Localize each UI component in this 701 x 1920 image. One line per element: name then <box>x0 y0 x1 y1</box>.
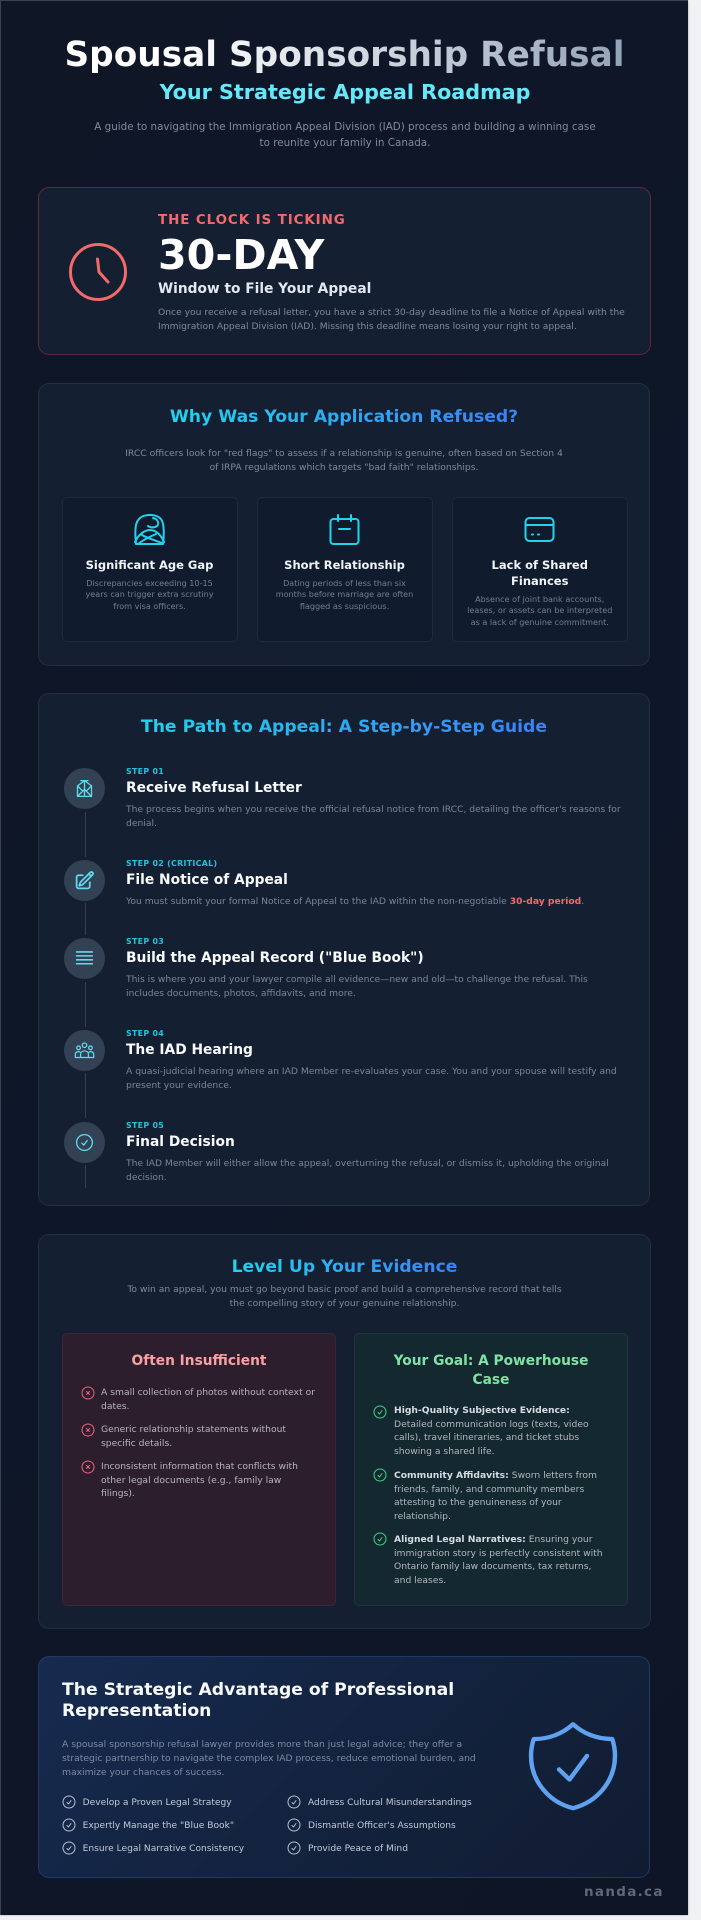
card text: leases, or assets can be interpreted <box>467 605 612 615</box>
box heading: Case <box>473 1372 509 1388</box>
panel: strategic advantage <box>38 1656 650 1878</box>
item 1 <box>374 1405 589 1457</box>
description <box>127 1284 562 1309</box>
step title: Build the Appeal Record ("Blue Book") <box>126 950 424 966</box>
step 5 <box>64 1120 609 1183</box>
item text <box>394 1405 589 1457</box>
intro text: A guide to navigating the Immigration Appeal Division (IAD) process and building a winning case <box>94 121 596 133</box>
item text: Detailed communication logs (texts, video <box>394 1419 589 1430</box>
box: powerhouse case <box>354 1333 628 1606</box>
icon: pencil <box>64 860 105 900</box>
title: Spousal Sponsorship Refusal <box>64 35 624 75</box>
card: short relationship <box>256 497 432 642</box>
panel: level up evidence <box>38 1234 651 1629</box>
item text: Community Affidavits: Sworn letters from <box>394 1470 597 1481</box>
description: strategic partnership to navigate the complex IAD process, reduce emotional burden, and <box>62 1753 476 1764</box>
step title: The IAD Hearing <box>126 1042 253 1058</box>
item 2 <box>82 1424 286 1449</box>
benefit <box>288 1794 508 1810</box>
item text: attesting to the genuineness of your <box>394 1497 562 1508</box>
item text: dates. <box>101 1401 129 1412</box>
card text: Dating periods of less than six <box>283 578 406 588</box>
card title: Lack of Shared <box>492 558 588 572</box>
step text: decision. <box>126 1172 167 1183</box>
icon: x <box>82 1386 94 1400</box>
subtitle: Your Strategic Appeal Roadmap <box>160 80 530 104</box>
item text <box>101 1387 315 1412</box>
benefit: Dismantle Officer's Assumptions <box>308 1820 456 1830</box>
description <box>125 448 563 473</box>
description: the compelling story of your genuine relationship. <box>230 1298 459 1309</box>
icon: age gap <box>134 514 165 545</box>
brand mark: nanda.ca <box>584 1884 664 1900</box>
card title: Short Relationship <box>284 558 405 572</box>
icon: people <box>64 1030 105 1070</box>
item text: Generic relationship statements without <box>101 1424 286 1435</box>
item text: Aligned Legal Narratives: Ensuring your <box>394 1534 593 1545</box>
deadline description <box>158 307 625 332</box>
icon: check circle <box>64 1122 105 1162</box>
step text: The IAD Member will either allow the appeal, overturning the refusal, or dismiss it, upholding the original <box>126 1158 609 1169</box>
item 3 <box>82 1460 298 1499</box>
card title: Significant Age Gap <box>86 558 213 572</box>
item text: immigration story is perfectly consistent with <box>394 1548 603 1559</box>
item text: and leases. <box>394 1575 446 1586</box>
item 2 <box>372 1467 612 1523</box>
card: age gap <box>62 497 238 642</box>
description: maximize your chances of success. <box>62 1767 224 1778</box>
step 1 <box>64 766 621 829</box>
item text: A small collection of photos without context or <box>101 1387 315 1398</box>
icon: x <box>82 1460 94 1474</box>
card text: Absence of joint bank accounts, <box>475 594 604 604</box>
panel: why refused <box>38 383 650 666</box>
step text <box>126 1066 617 1091</box>
panel: 30-day deadline <box>38 187 651 355</box>
benefit <box>62 1817 282 1833</box>
deadline description: Immigration Appeal Division (IAD). Missing this deadline means losing your right to appeal. <box>158 321 577 332</box>
benefit <box>288 1817 508 1833</box>
box heading: Your Goal: A Powerhouse <box>394 1352 588 1368</box>
benefit <box>62 1794 282 1810</box>
icon: letter <box>64 768 105 808</box>
step text: denial. <box>126 818 157 829</box>
step title: File Notice of Appeal <box>126 872 288 888</box>
step text: includes documents, photos, affidavits, and more. <box>126 988 356 999</box>
card text: flagged as suspicious. <box>300 600 389 610</box>
card text: Discrepancies exceeding 10-15 <box>86 578 213 588</box>
card text <box>276 578 413 610</box>
intro text <box>94 121 596 149</box>
intro text: to reunite your family in Canada. <box>260 137 430 149</box>
card text: years can trigger extra scrutiny <box>86 589 214 599</box>
icon: check <box>372 1467 388 1483</box>
item 1 <box>82 1386 315 1412</box>
item text: other legal documents (e.g., family law <box>101 1475 281 1486</box>
icon: check <box>374 1406 386 1418</box>
card text <box>86 578 214 610</box>
benefit: Address Cultural Misunderstandings <box>308 1798 472 1808</box>
item text: filings). <box>101 1488 135 1499</box>
step label: STEP 02 (CRITICAL) <box>126 858 217 868</box>
icon: shield <box>517 1712 629 1820</box>
step title: Receive Refusal Letter <box>126 780 302 796</box>
description: of IRPA regulations which targets "bad faith" relationships. <box>210 462 478 473</box>
item text: showing a shared life. <box>394 1446 495 1457</box>
step text: present your evidence. <box>126 1080 232 1091</box>
step 4 <box>64 1028 617 1091</box>
benefit <box>288 1840 508 1856</box>
card text <box>467 594 612 626</box>
big number: 30-DAY <box>158 231 324 279</box>
benefit: Provide Peace of Mind <box>308 1844 408 1854</box>
card title <box>492 558 588 588</box>
description <box>62 1738 476 1779</box>
window text: Window to File Your Appeal <box>158 281 371 297</box>
card text: from visa officers. <box>113 600 186 610</box>
benefit: Ensure Legal Narrative Consistency <box>83 1844 244 1854</box>
box heading <box>394 1352 588 1388</box>
heading: Why Was Your Application Refused? <box>170 407 518 427</box>
description: IRCC officers look for "red flags" to assess if a relationship is genuine, often based on Section 4 <box>125 448 563 459</box>
item text: High-Quality Subjective Evidence: <box>394 1405 570 1416</box>
description: To win an appeal, you must go beyond basic proof and build a comprehensive record that tells <box>127 1284 562 1295</box>
item text: Inconsistent information that conflicts with <box>101 1461 298 1472</box>
icon: clock <box>69 243 127 301</box>
card text: as a lack of genuine commitment. <box>471 616 609 626</box>
card: shared finances <box>452 497 628 642</box>
step label: STEP 03 <box>126 936 164 946</box>
heading: The Path to Appeal: A Step-by-Step Guide <box>141 717 547 737</box>
step text: The process begins when you receive the official refusal notice from IRCC, detailing the officer's reasons for <box>126 804 621 815</box>
step text: A quasi-judicial hearing where an IAD Member re-evaluates your case. You and your spouse will testify and <box>126 1066 617 1077</box>
item text <box>394 1469 597 1524</box>
icon: calendar <box>330 514 360 545</box>
heading <box>62 1680 454 1722</box>
eyebrow: THE CLOCK IS TICKING <box>158 213 346 228</box>
item text: relationship. <box>394 1511 451 1522</box>
benefit list <box>62 1794 502 1864</box>
benefit <box>62 1840 282 1856</box>
step text <box>126 804 621 829</box>
benefit: Expertly Manage the "Blue Book" <box>83 1820 234 1830</box>
icon: document lines <box>64 938 105 978</box>
step text <box>126 974 588 999</box>
step text: You must submit your formal Notice of Appeal to the IAD within the non-negotiable 30-day period. <box>126 896 584 907</box>
step label: STEP 05 <box>126 1120 164 1130</box>
item text <box>394 1533 603 1588</box>
box: often insufficient <box>62 1333 336 1606</box>
description: A spousal sponsorship refusal lawyer provides more than just legal advice; they offer a <box>62 1739 462 1750</box>
item text <box>101 1461 298 1499</box>
icon: x <box>82 1424 94 1436</box>
deadline description: Once you receive a refusal letter, you have a strict 30-day deadline to file a Notice of Appeal with the <box>158 307 625 318</box>
step label: STEP 01 <box>126 766 164 776</box>
card text: months before marriage are often <box>276 589 413 599</box>
header <box>64 35 624 149</box>
item text: calls), travel itineraries, and ticket stubs <box>394 1432 579 1443</box>
benefit: Develop a Proven Legal Strategy <box>83 1798 232 1808</box>
heading: The Strategic Advantage of Professional <box>62 1680 454 1700</box>
step 2 <box>64 858 584 907</box>
panel: path to appeal <box>38 693 650 1206</box>
item text: friends, family, and community members <box>394 1484 584 1495</box>
icon: check <box>372 1531 388 1547</box>
item text: Ontario family law documents, tax returns, <box>394 1561 591 1572</box>
step 3 <box>64 936 588 999</box>
step label: STEP 04 <box>126 1028 164 1038</box>
step text <box>126 1158 609 1183</box>
step title: Final Decision <box>126 1134 235 1150</box>
heading: Level Up Your Evidence <box>232 1257 457 1277</box>
step text: This is where you and your lawyer compile all evidence—new and old—to challenge the refusal. This <box>126 974 588 985</box>
item 3 <box>372 1531 612 1587</box>
item text: specific details. <box>101 1438 172 1449</box>
box heading: Often Insufficient <box>132 1352 266 1368</box>
card title: Finances <box>511 574 568 588</box>
heading: Representation <box>62 1700 211 1720</box>
icon: credit card <box>524 517 554 542</box>
item text <box>101 1424 286 1449</box>
